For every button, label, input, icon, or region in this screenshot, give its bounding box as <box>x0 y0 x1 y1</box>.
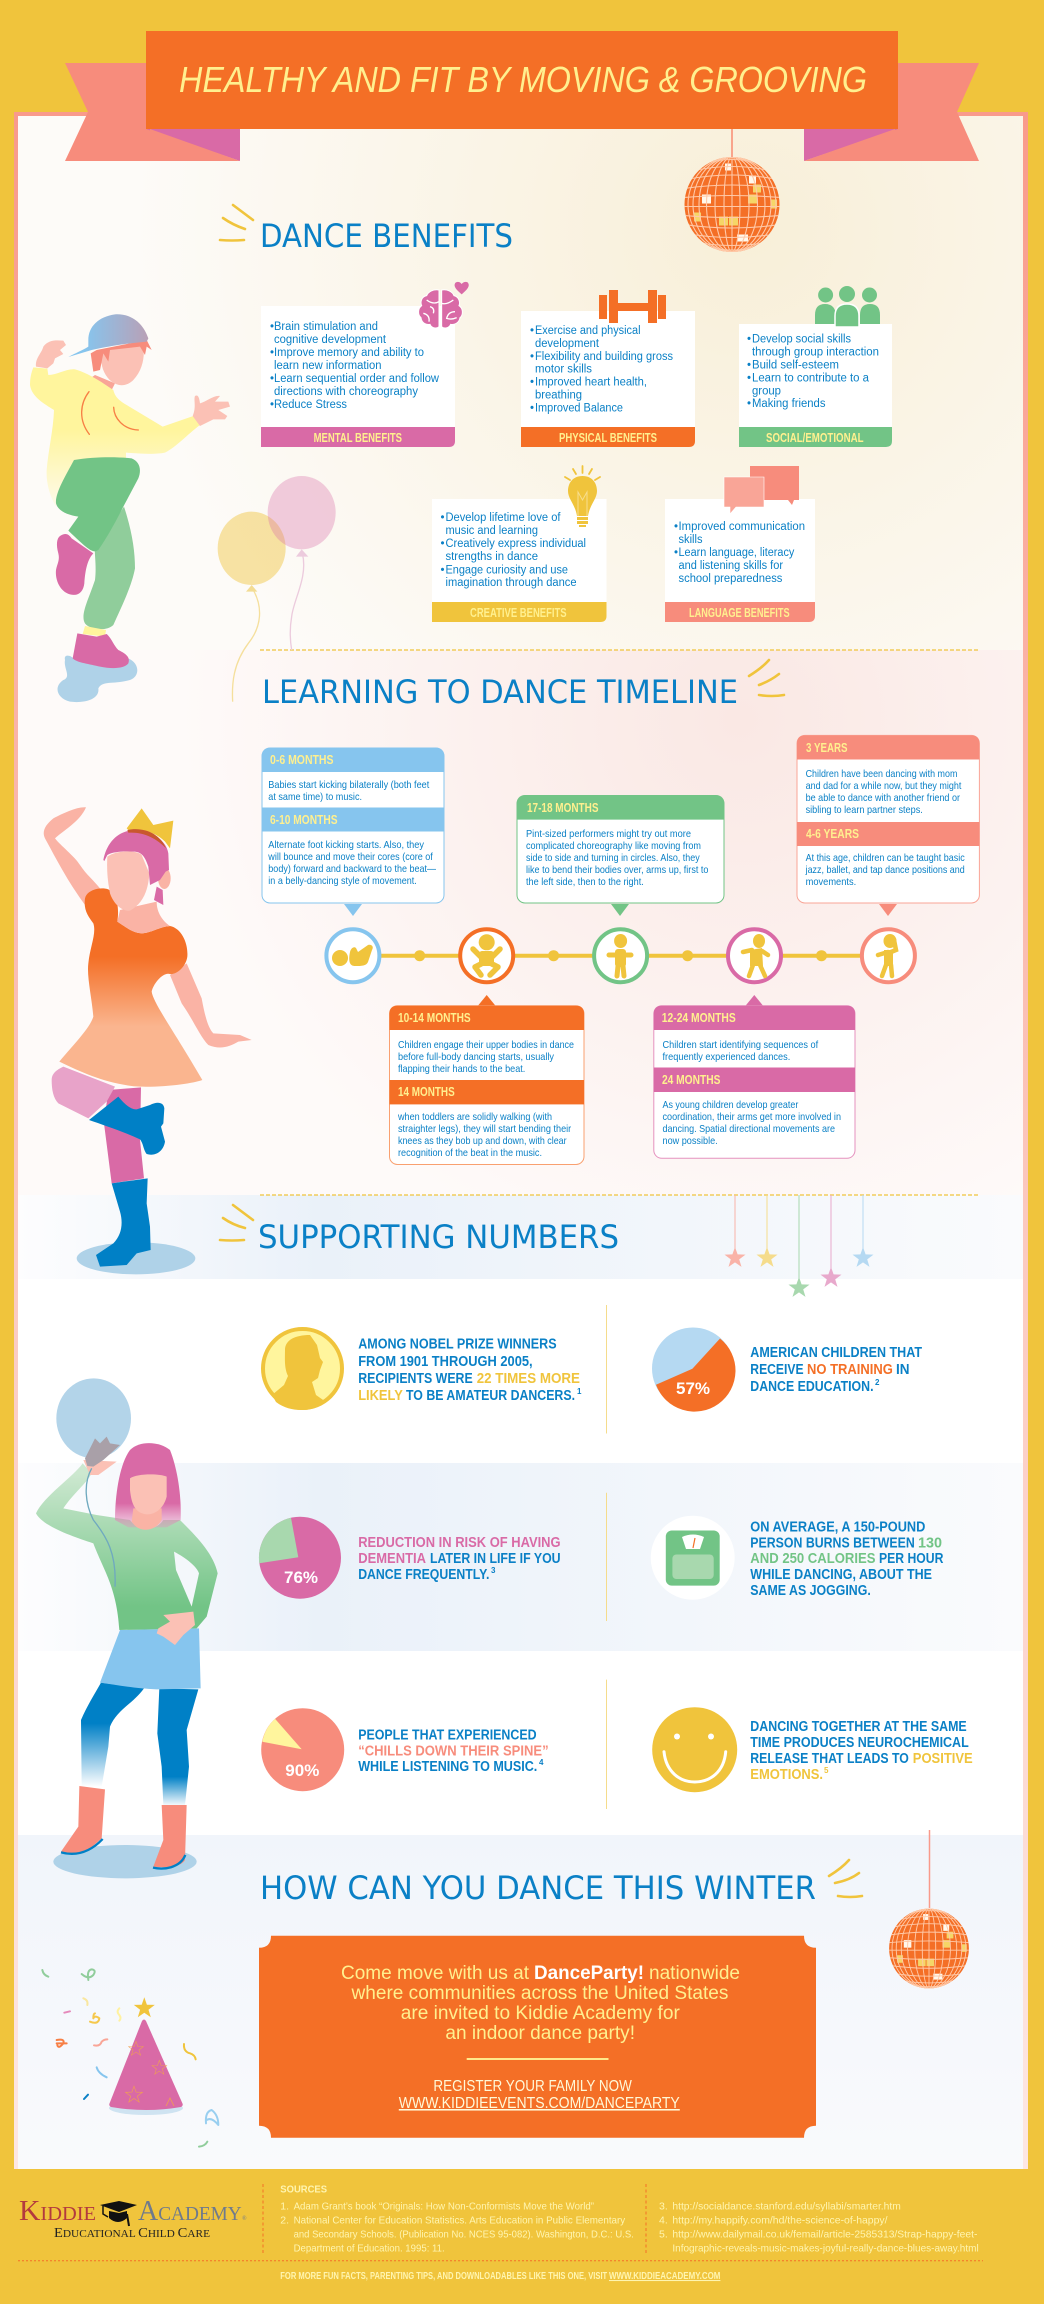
card: 17-18 months: side to side and turning in circles. Also, they <box>526 852 700 864</box>
text: ON AVERAGE, A 150-POUND <box>750 1520 925 1536</box>
register link <box>399 2078 680 2112</box>
heading: dance benefits: DANCE BENEFITS <box>260 217 513 255</box>
creative list: strengths in dance <box>446 551 538 563</box>
panel: language benefits: LANGUAGE BENEFITS <box>689 606 790 620</box>
text <box>358 1336 582 1404</box>
disco ball top <box>684 129 780 252</box>
logo: kiddie academy: KIDDIE <box>19 2195 96 2227</box>
text: WHILE LISTENING TO MUSIC. <box>358 1759 537 1775</box>
panel: mental benefits: MENTAL BENEFITS <box>314 431 402 445</box>
card: 0-10 months: at same time) to music. <box>268 791 362 803</box>
balloons <box>218 476 336 702</box>
text: PERSON BURNS BETWEEN <box>750 1536 915 1552</box>
panel: physical benefits: PHYSICAL BENEFITS <box>559 431 657 445</box>
heading: supporting numbers <box>220 1205 619 1256</box>
card: 17-18 months: 17-18 MONTHS <box>527 801 598 815</box>
icon: walking toddler <box>728 929 781 982</box>
card: 10-14 months: when toddlers are solidly walking (with <box>397 1111 552 1123</box>
logo: kiddie academy <box>19 2195 247 2240</box>
text: RELEASE THAT LEADS TO <box>750 1751 909 1767</box>
text: RECIPIENTS WERE <box>358 1371 473 1387</box>
physical list: breathing <box>535 390 582 402</box>
language list: school preparedness <box>678 573 783 585</box>
text: LIKELY <box>358 1388 403 1404</box>
text: AMERICAN CHILDREN THAT <box>750 1345 922 1361</box>
sources: 1. <box>280 2200 289 2212</box>
card: 3-6 years: At this age, children can be taught basic <box>806 852 965 864</box>
social list: Learn to contribute to a <box>752 372 870 384</box>
icon: baby feet <box>326 929 379 982</box>
mental list: Brain stimulation and <box>274 321 378 333</box>
text <box>750 1345 922 1395</box>
social list: • <box>747 360 751 372</box>
text <box>750 1719 973 1783</box>
card: 17-18 months: complicated choreography like moving from <box>526 840 701 852</box>
sources: 5. <box>659 2228 668 2240</box>
card: 10-14 months: recognition of the beat in the music. <box>398 1147 542 1159</box>
mental list: learn new information <box>274 360 382 372</box>
card: 10-14 months <box>390 995 584 1164</box>
social list: Develop social skills <box>752 334 851 346</box>
text: AMONG NOBEL PRIZE WINNERS <box>358 1336 557 1352</box>
logo: kiddie academy: ® <box>242 2215 247 2222</box>
physical list: • <box>530 376 534 388</box>
icon: three people <box>815 286 880 327</box>
card: 10-14 months: knees as they bob up and down, with clear <box>398 1135 567 1147</box>
text <box>750 1520 944 1599</box>
stat: chills <box>261 1680 606 1809</box>
text: 130 <box>918 1536 942 1552</box>
card: 0-10 months: 0-6 MONTHS <box>270 753 334 767</box>
text: PEOPLE THAT EXPERIENCED <box>358 1728 537 1744</box>
panel: social emotional: SOCIAL/EMOTIONAL <box>766 431 864 445</box>
disco ball bottom <box>889 1830 969 1988</box>
physical list: Exercise and physical <box>535 325 640 337</box>
heading: how can you dance: HOW CAN YOU DANCE THIS WINTER <box>260 1869 816 1907</box>
card: 12-24 months: frequently experienced dances. <box>662 1051 790 1063</box>
invitation text: DanceParty! <box>534 1963 644 1984</box>
panel: creative benefits: CREATIVE BENEFITS <box>470 606 567 620</box>
text: PER HOUR <box>879 1551 944 1567</box>
physical list: Improved Balance <box>535 402 623 414</box>
card: 10-14 months: straighter legs), they will start bending their <box>398 1123 572 1135</box>
mental list: Reduce Stress <box>274 399 347 411</box>
creative list: • <box>440 512 445 524</box>
sources: http://my.happify.com/hd/the-science-of-happy/ <box>672 2214 888 2226</box>
title banner <box>65 31 979 161</box>
language list: • <box>674 521 678 533</box>
physical list: development <box>535 338 600 350</box>
card: 12-24 months: Children start identifying sequences of <box>662 1039 818 1051</box>
creative list: music and learning <box>446 525 538 537</box>
language list: Improved communication <box>678 521 805 533</box>
card: 17-18 months: Pint-sized performers might try out more <box>526 828 691 840</box>
text: 5 <box>824 1766 829 1775</box>
pie chart: 90% <box>261 1708 344 1791</box>
card: 12-24 months: As young children develop greater <box>662 1099 799 1111</box>
card: 12-24 months: 24 MONTHS <box>662 1073 720 1087</box>
icon: smiley <box>652 1707 737 1792</box>
icon: graduation cap <box>100 2201 137 2226</box>
sources: National Center for Education Statistics. Arts Education in Public Elementary <box>294 2214 626 2226</box>
creative list: Engage curiosity and use <box>446 564 568 576</box>
card: 17-18 months: the left side, then to the right. <box>526 876 644 888</box>
stat: nobel prize <box>263 1305 606 1434</box>
icon: speech bubbles <box>724 466 799 514</box>
text: IN <box>896 1362 910 1378</box>
text: WHILE DANCING, ABOUT THE <box>750 1567 932 1583</box>
card: 3-6 years: sibling to learn partner steps. <box>806 804 923 816</box>
card: 12-24 months: dancing. Spatial directional movements are <box>662 1123 835 1135</box>
card: 3-6 years: Children have been dancing with mom <box>806 768 958 780</box>
text: LATER IN LIFE IF YOU <box>430 1551 561 1567</box>
footer note <box>18 2261 983 2282</box>
icon: crawling baby <box>460 929 513 982</box>
creative list: Develop lifetime love of <box>446 512 561 524</box>
physical list <box>530 325 673 414</box>
card: 10-14 months: 14 MONTHS <box>398 1085 455 1099</box>
card: 0-10 months: Babies start kicking bilaterally (both feet <box>268 779 429 791</box>
text: REDUCTION IN RISK OF HAVING <box>358 1535 561 1551</box>
sources: 3. <box>659 2200 668 2212</box>
language list: Learn language, literacy <box>678 547 795 559</box>
timeline axis <box>326 929 915 982</box>
mental list: • <box>270 321 274 333</box>
card: 12-24 months: coordination, their arms get more involved in <box>662 1111 841 1123</box>
social list: • <box>747 334 751 346</box>
dancer: girl in orange dress <box>44 807 252 1274</box>
physical list: Flexibility and building gross <box>535 351 673 363</box>
mental list <box>270 321 440 411</box>
card: 3-6 years: 4-6 YEARS <box>806 827 859 841</box>
register link: REGISTER YOUR FAMILY NOW <box>433 2078 632 2095</box>
language list: skills <box>678 534 703 546</box>
creative list: • <box>440 538 445 550</box>
card: 10-14 months: Children engage their upper bodies in dance <box>398 1039 574 1051</box>
text: 22 TIMES MORE <box>477 1371 580 1387</box>
language list <box>674 521 805 585</box>
card: 0-10 months <box>262 748 444 916</box>
card: 12-24 months <box>654 995 855 1158</box>
physical list: • <box>530 351 534 363</box>
mental list: directions with choreography <box>274 386 418 398</box>
text: AND 250 CALORIES <box>750 1551 876 1567</box>
icon: light bulb <box>565 466 600 527</box>
pie chart: 57% <box>652 1328 736 1412</box>
text: DANCING TOGETHER AT THE SAME <box>750 1719 967 1735</box>
language list: and listening skills for <box>678 560 783 572</box>
invitation text: nationwide <box>649 1963 740 1984</box>
pie chart: 57%: 57% <box>676 1379 710 1398</box>
card: 0-10 months: will bounce and move their cores (core of <box>267 851 433 863</box>
mental list: • <box>270 373 274 385</box>
icon: scale <box>651 1516 735 1600</box>
text: DANCE FREQUENTLY. <box>358 1567 489 1583</box>
card: 10-14 months: 10-14 MONTHS <box>398 1011 471 1025</box>
mental list: • <box>270 399 274 411</box>
icon: coin <box>263 1329 342 1410</box>
physical list: Improved heart health, <box>535 376 647 388</box>
text: 4 <box>539 1758 544 1767</box>
dancer: girl with balloon <box>36 1378 218 1878</box>
card: 0-10 months: 6-10 MONTHS <box>270 813 338 827</box>
creative list <box>440 512 586 589</box>
creative list: • <box>440 564 445 576</box>
card: 17-18 months <box>517 796 724 916</box>
icon: dumbbell <box>599 290 666 323</box>
panel: physical benefits <box>521 290 695 447</box>
panel: social emotional <box>739 286 892 447</box>
physical list: • <box>530 402 534 414</box>
heading: learning timeline: LEARNING TO DANCE TIMELINE <box>262 673 738 711</box>
pie chart: 76%: 76% <box>284 1568 318 1587</box>
text: NO TRAINING <box>807 1362 893 1378</box>
mental list: Learn sequential order and follow <box>274 373 440 385</box>
text <box>358 1728 549 1775</box>
card: 10-14 months: before full-body dancing starts, usually <box>398 1051 555 1063</box>
heading: dance benefits <box>220 205 513 255</box>
text: SAME AS JOGGING. <box>750 1583 871 1599</box>
language list: • <box>674 547 678 559</box>
invitation text: Come move with us at <box>341 1963 530 1984</box>
social list: Build self-esteem <box>752 360 839 372</box>
sources: and Secondary Schools. (Publication No. NCES 95-082). Washington, D.C.: U.S. <box>294 2228 634 2240</box>
card: 12-24 months: now possible. <box>662 1135 718 1147</box>
stat: calories <box>651 1516 944 1600</box>
physical list: • <box>530 325 534 337</box>
sources: 4. <box>659 2214 668 2226</box>
hanging stars <box>724 1195 874 1297</box>
physical list: motor skills <box>535 364 592 376</box>
card: 3-6 years: and dad for a while now, but they might <box>806 780 961 792</box>
text: “CHILLS DOWN THEIR SPINE” <box>358 1744 549 1760</box>
logo: kiddie academy: ACADEMY <box>138 2195 242 2227</box>
card: 17-18 months: like to bend their bodies over, arms up, first to <box>526 864 709 876</box>
sources: Adam Grant’s book “Originals: How Non-Conformists Move the World” <box>294 2200 594 2212</box>
footer note: WWW.KIDDIEACADEMY.COM <box>609 2270 721 2282</box>
register link: WWW.KIDDIEEVENTS.COM/DANCEPARTY <box>399 2095 680 2112</box>
sources: http://socialdance.stanford.edu/syllabi/smarter.htm <box>672 2200 901 2212</box>
mental list: cognitive development <box>274 334 387 346</box>
panel: creative benefits <box>432 466 606 622</box>
dancer: boy in cap <box>30 314 230 702</box>
icon: dancing child <box>862 929 915 982</box>
icon: brain with heart <box>419 282 469 328</box>
text: DEMENTIA <box>358 1551 426 1567</box>
stat: dementia <box>259 1493 606 1621</box>
sources: Infographic-reveals-music-makes-joyful-really-dance-blues-away.html <box>672 2242 979 2254</box>
social list: • <box>747 398 751 410</box>
card: 12-24 months: 12-24 MONTHS <box>662 1011 736 1025</box>
footer note: FOR MORE FUN FACTS, PARENTING TIPS, AND DOWNLOADABLES LIKE THIS ONE, VISIT <box>280 2270 608 2282</box>
party hat and confetti <box>42 1969 218 2147</box>
text: POSITIVE <box>913 1751 973 1767</box>
card: 0-10 months: in a belly-dancing style of movement. <box>268 875 417 887</box>
card: 0-10 months: body) forward and backward to the beat— <box>268 863 436 875</box>
heading: supporting numbers: SUPPORTING NUMBERS <box>258 1218 619 1256</box>
invitation text: where communities across the United States <box>350 1983 728 2004</box>
text: DANCE EDUCATION. <box>750 1379 874 1395</box>
stat: no training <box>652 1328 922 1412</box>
text: FROM 1901 THROUGH 2005, <box>358 1354 533 1370</box>
card: 0-10 months: Alternate foot kicking starts. Also, they <box>268 839 425 851</box>
sources: http://www.dailymail.co.uk/femail/article-2585313/Strap-happy-feet- <box>672 2228 978 2240</box>
invitation text: an indoor dance party! <box>445 2023 635 2044</box>
card: 3-6 years: 3 YEARS <box>806 741 848 755</box>
title text: HEALTHY AND FIT BY MOVING & GROOVING <box>179 59 867 100</box>
panel: mental benefits <box>261 282 469 447</box>
social list: • <box>747 372 751 384</box>
logo: kiddie academy: EDUCATIONAL CHILD CARE <box>54 2225 210 2240</box>
card: 3-6 years <box>797 735 979 916</box>
sources: 2. <box>280 2214 289 2226</box>
sources: SOURCES <box>280 2184 327 2196</box>
icon: standing toddler <box>594 929 647 982</box>
invitation text: are invited to Kiddie Academy for <box>401 2003 680 2024</box>
card: 3-6 years: be able to dance with another friend or <box>806 792 960 804</box>
mental list: • <box>270 347 274 359</box>
invitation text <box>341 1963 740 2044</box>
text: TIME PRODUCES NEUROCHEMICAL <box>750 1735 969 1751</box>
card: 3-6 years: movements. <box>806 876 856 888</box>
text: TO BE AMATEUR DANCERS. <box>406 1388 575 1404</box>
social list <box>747 334 879 410</box>
text <box>358 1535 561 1583</box>
social list: Making friends <box>752 398 826 410</box>
text: RECEIVE <box>750 1362 804 1378</box>
creative list: Creatively express individual <box>446 538 586 550</box>
mental list: Improve memory and ability to <box>274 347 424 359</box>
pie chart: 76% <box>259 1517 341 1599</box>
card: 10-14 months: flapping their hands to the beat. <box>398 1063 525 1075</box>
creative list: imagination through dance <box>446 577 576 589</box>
text: EMOTIONS. <box>750 1767 823 1783</box>
call to action panel <box>259 1936 816 2138</box>
text: 1 <box>577 1387 582 1396</box>
text: 3 <box>491 1566 496 1575</box>
card: 3-6 years: jazz, ballet, and tap dance positions and <box>805 864 965 876</box>
pie chart: 90%: 90% <box>285 1761 319 1780</box>
panel: language benefits <box>665 466 815 622</box>
stat: positive emotions <box>652 1707 973 1792</box>
social list: group <box>752 386 781 398</box>
sources <box>263 2184 979 2254</box>
social list: through group interaction <box>752 346 879 358</box>
sources: Department of Education. 1995: 11. <box>294 2242 445 2254</box>
text: 2 <box>875 1378 880 1387</box>
